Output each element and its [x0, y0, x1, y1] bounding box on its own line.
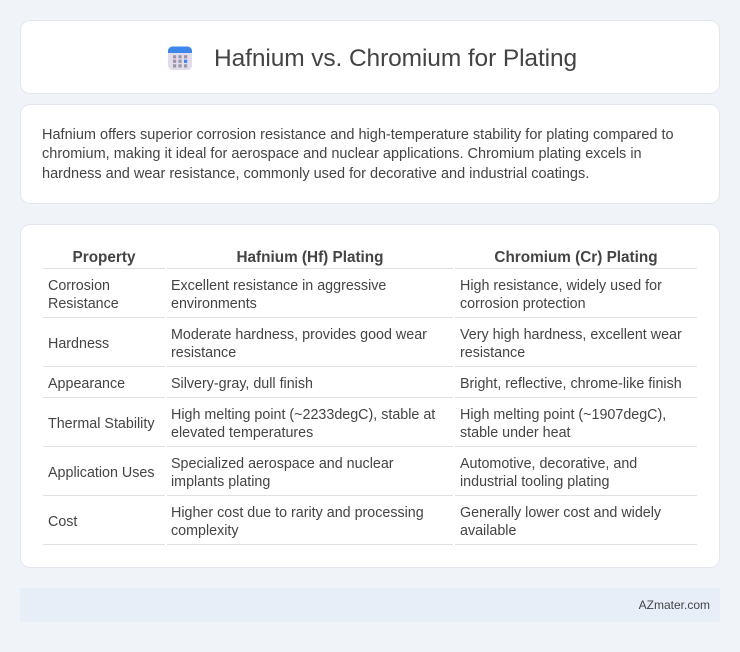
title: Hafnium vs. Chromium for Plating — [214, 45, 577, 72]
application: chromium: industrial tooling plating — [460, 474, 609, 490]
footer source text: AZmater.com — [639, 598, 710, 612]
application: hafnium: implants plating — [171, 474, 270, 490]
hardness: chromium — [460, 327, 682, 361]
table header: property: Property — [73, 249, 135, 266]
footer bar — [20, 588, 720, 622]
title card — [20, 20, 720, 94]
thermal: chromium: stable under heat — [460, 425, 570, 441]
row: corrosion resistance: Resistance — [48, 296, 119, 312]
intro text: chromium, making it ideal for aerospace and nuclear applications. Chromium plating excels in — [42, 146, 642, 162]
cost: hafnium: Higher cost due to rarity and processing — [171, 505, 424, 521]
row: appearance: Appearance — [48, 376, 125, 392]
icon: calendar — [168, 46, 192, 70]
appearance: chromium: Bright, reflective, chrome-like finish — [460, 376, 682, 392]
intro text: hardness and wear resistance, commonly used for decorative and industrial coatings. — [42, 166, 589, 182]
application: hafnium: Specialized aerospace and nuclear — [171, 456, 394, 472]
corrosion: hafnium: Excellent resistance in aggressive — [171, 278, 386, 294]
intro panel — [20, 104, 720, 204]
row: corrosion resistance — [48, 278, 119, 312]
hardness: chromium: resistance — [460, 345, 525, 361]
corrosion: chromium: High resistance, widely used for — [460, 278, 662, 294]
hardness: hafnium — [171, 327, 427, 361]
row: application uses: Application Uses — [48, 465, 154, 481]
corrosion: hafnium: environments — [171, 296, 257, 312]
appearance: hafnium: Silvery-gray, dull finish — [171, 376, 313, 392]
cost: chromium — [460, 505, 661, 539]
thermal: hafnium — [171, 407, 436, 441]
application: chromium — [460, 456, 637, 490]
hardness: hafnium: Moderate hardness, provides good wear — [171, 327, 427, 343]
comparison table panel — [20, 224, 720, 568]
cost: chromium: available — [460, 523, 516, 539]
thermal: hafnium: High melting point (~2233degC), stable at — [171, 407, 435, 423]
corrosion: chromium — [460, 278, 662, 312]
application: hafnium — [171, 456, 394, 490]
cost: hafnium — [171, 505, 424, 539]
corrosion: chromium: corrosion protection — [460, 296, 586, 312]
row: thermal stability: Thermal Stability — [48, 416, 154, 432]
intro text — [42, 127, 674, 182]
table header: chromium: Chromium (Cr) Plating — [494, 249, 658, 266]
row: corrosion resistance: Corrosion — [48, 278, 110, 294]
corrosion: hafnium — [171, 278, 386, 312]
cost: hafnium: complexity — [171, 523, 239, 539]
table header: hafnium: Hafnium (Hf) Plating — [236, 249, 384, 266]
thermal: chromium: High melting point (~1907degC), — [460, 407, 666, 423]
cost: chromium: Generally lower cost and widely — [460, 505, 661, 521]
intro text: Hafnium offers superior corrosion resistance and high-temperature stability for plating compared to — [42, 127, 674, 143]
thermal: chromium — [460, 407, 666, 441]
row: cost: Cost — [48, 514, 77, 530]
row: hardness: Hardness — [48, 336, 109, 352]
application: chromium: Automotive, decorative, and — [460, 456, 637, 472]
hardness: hafnium: resistance — [171, 345, 236, 361]
thermal: hafnium: elevated temperatures — [171, 425, 313, 441]
hardness: chromium: Very high hardness, excellent wear — [460, 327, 682, 343]
